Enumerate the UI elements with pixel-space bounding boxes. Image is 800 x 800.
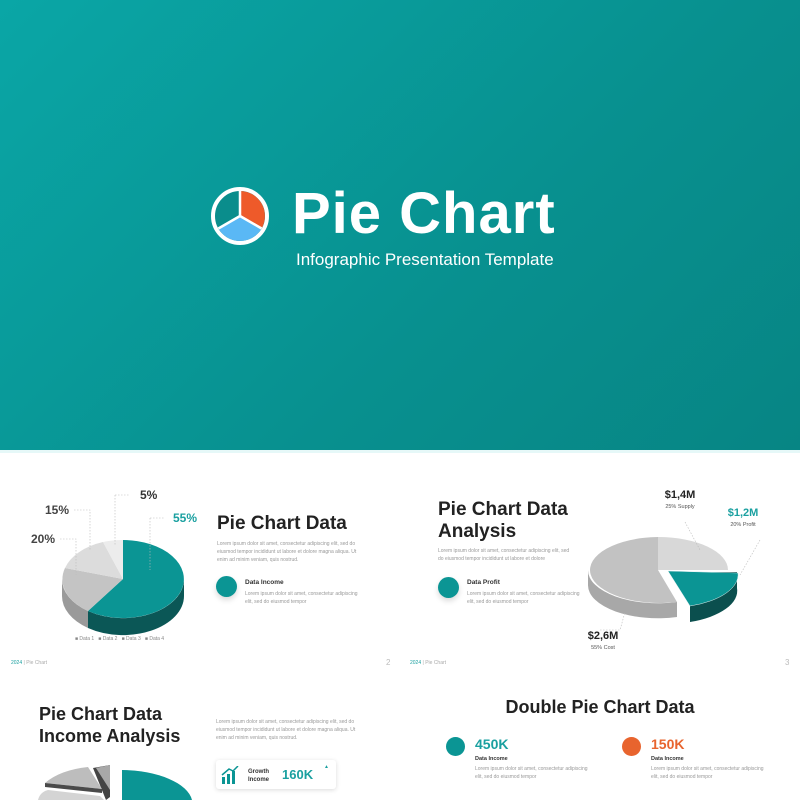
- label: $1,2M: [728, 507, 758, 528]
- label: $1,2M: $1,2M: [728, 507, 758, 519]
- card: growth income: ▲: [324, 764, 329, 770]
- item: data income: Data Income: [245, 579, 284, 586]
- pie chart 2: [588, 522, 760, 630]
- label: $2,6M: $2,6M: [588, 630, 618, 642]
- stat: 450K: [475, 736, 588, 780]
- stat: 450K: 450K: [475, 736, 508, 752]
- stat: 150K: 150K: [651, 736, 684, 752]
- label: $2,6M: [588, 630, 618, 651]
- heading: Pie Chart Data: [217, 513, 347, 534]
- icon: data profit: [438, 577, 459, 598]
- label: $2,6M: 55% Cost: [591, 645, 615, 651]
- heading: [39, 704, 180, 746]
- labels: percentages: 20%: [31, 532, 55, 546]
- item: data income: Lorem ipsum dolor sit amet, consectetur adipiscing elit, sed do eiusmod tempor: [245, 591, 358, 605]
- footer: 2024 | Pie Chart: [11, 660, 47, 666]
- label: $1,4M: 25% Supply: [665, 504, 695, 510]
- heading: Double Pie Chart Data: [505, 697, 695, 717]
- text block: Lorem ipsum dolor sit amet, consectetur adipiscing elit, sed do eiusmod tempor incididunt ut labore et dolore magna aliqua. Ut enim ad minim veniam, quis nostrud.: [216, 719, 355, 741]
- panel: slide 2 pie chart data: 55%: [173, 511, 197, 525]
- stat: 450K: Data Income: [475, 756, 508, 762]
- label: $1,4M: [664, 489, 695, 510]
- icon: 450K: [446, 737, 465, 756]
- item: data profit: [467, 579, 580, 605]
- panel: slide 2 pie chart data: 5%: [140, 488, 157, 502]
- item: data profit: Data Profit: [467, 579, 500, 586]
- heading: Income Analysis: [39, 726, 180, 746]
- heading: [438, 499, 568, 542]
- card: growth income: Income: [248, 777, 269, 783]
- panel: slide 3 analysis: 3: [785, 658, 789, 667]
- hero panel: [0, 0, 800, 450]
- panel: slide 2 pie chart data: 15%: [45, 503, 69, 517]
- card: growth income: 160K: [282, 767, 313, 782]
- label: $1,4M: $1,4M: [665, 489, 695, 501]
- panel: slide 2 pie chart data: 2: [386, 658, 390, 667]
- text block: Lorem ipsum dolor sit amet, consectetur adipiscing elit, sed do eiusmod tempor incididunt ut labore et dolore: [438, 548, 569, 562]
- item: data income: [245, 579, 358, 605]
- heading: Analysis: [438, 521, 516, 542]
- text block: Lorem ipsum dolor sit amet, consectetur adipiscing elit, sed do eiusmod tempor incididunt ut labore et dolore magna aliqua. Ut enim ad minim veniam, quis nostrud.: [217, 541, 356, 563]
- legend: ■ Data 1 ■ Data 2 ■ Data 3 ■ Data 4: [75, 636, 164, 642]
- stat: 150K: [651, 736, 764, 780]
- pie chart 1: [60, 494, 184, 636]
- heading: Pie Chart Data: [39, 704, 162, 724]
- stat: 450K: Lorem ipsum dolor sit amet, consectetur adipiscing elit, sed do eiusmod tempor: [475, 766, 588, 780]
- panel: slide 4 income analysis: [38, 704, 356, 800]
- icon: data income: [216, 576, 237, 597]
- stat: 150K: Lorem ipsum dolor sit amet, consectetur adipiscing elit, sed do eiusmod tempor: [651, 766, 764, 780]
- card: growth income: Growth: [248, 769, 269, 775]
- pie chart 3 partial: [38, 765, 192, 800]
- stat: 150K: Data Income: [651, 756, 684, 762]
- heading: Pie Chart Data: [438, 499, 568, 520]
- icon: 150K: [622, 737, 641, 756]
- panel: slide 5 double pie: [446, 697, 764, 780]
- title: Pie Chart: [292, 181, 556, 246]
- subtitle: Infographic Presentation Template: [296, 250, 554, 269]
- card: growth income: [216, 760, 336, 789]
- item: data profit: Lorem ipsum dolor sit amet, consectetur adipiscing elit, sed do eiusmod tempor: [467, 591, 580, 605]
- label: $1,2M: 20% Profit: [730, 522, 756, 528]
- footer: 2024 | Pie Chart: [410, 660, 446, 666]
- icon: pie logo: [211, 187, 269, 245]
- panel: slide 3 analysis: [410, 489, 790, 667]
- panel: slide 2 pie chart data: [11, 488, 390, 667]
